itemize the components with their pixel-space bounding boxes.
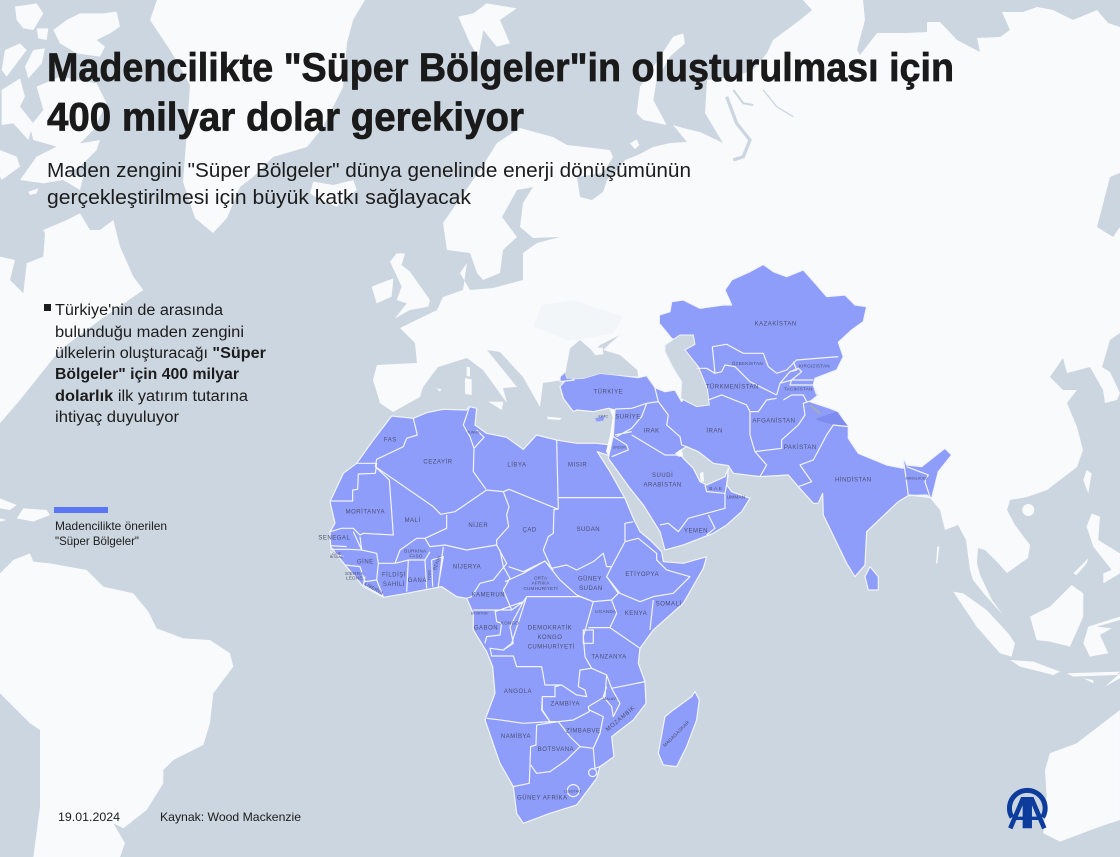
- callout text with bullet: ülkelerin oluşturacağı "Süper: [55, 345, 266, 362]
- legend: [54, 507, 167, 548]
- Africa labels: MALAVİ: [603, 696, 617, 701]
- title: 400 milyar dolar gerekiyor: [47, 96, 524, 140]
- Africa labels: MOZAMBİK: [605, 705, 637, 733]
- Africa labels: TUNUS: [467, 430, 480, 434]
- Asia labels: YEMEN: [684, 528, 708, 534]
- Africa labels: LEONE: [346, 575, 363, 580]
- callout text with bullet: bulunduğu maden zengini: [55, 324, 244, 341]
- Asia labels: PAKİSTAN: [784, 444, 817, 451]
- callout text with bullet: Türkiye'nin de arasında: [55, 302, 223, 319]
- Africa labels: ZAMBİYA: [551, 701, 580, 708]
- Asia labels: ÜRDÜN: [613, 445, 626, 449]
- Africa labels: MALİ: [405, 517, 421, 524]
- Israel land strip: [606, 409, 618, 462]
- callout text with bullet: dolarlık ilk yatırım tutarına: [55, 388, 248, 405]
- Asia labels: UMMAN: [727, 494, 745, 499]
- Africa labels: SUDAN: [579, 586, 603, 592]
- Africa labels: ÇAD: [523, 527, 537, 533]
- Asia labels: TÜRKİYE: [593, 389, 623, 396]
- Africa labels: DEMOKRATİK: [528, 624, 572, 631]
- Africa labels: SENEGAL: [318, 535, 350, 541]
- Africa labels: TOGO: [427, 570, 431, 580]
- Madagascar: [658, 692, 699, 767]
- Africa labels: GÜNEY: [578, 575, 602, 582]
- Africa labels: ANGOLA: [504, 689, 532, 695]
- Africa labels: FASO: [409, 553, 423, 558]
- Asia labels: ARABİSTAN: [644, 482, 682, 489]
- Asia labels: ÖZBEKİSTAN: [732, 360, 763, 366]
- Africa labels: UGANDA: [595, 609, 617, 614]
- Africa labels: GİNE: [332, 551, 342, 556]
- subtitle: gerçekleştirilmesi için büyük katkı sağlayacak: [47, 187, 472, 209]
- Turkish Thrace: [560, 372, 574, 382]
- Asia labels: SUUDİ: [652, 472, 673, 479]
- Africa labels: KONGO: [501, 620, 519, 625]
- callout text with bullet: Bölgeler" için 400 milyar: [55, 366, 239, 383]
- subtitle: [47, 160, 691, 209]
- Africa labels: ORTA: [534, 575, 548, 580]
- Caribbean and South America: [0, 498, 233, 857]
- Africa labels: KONGO: [537, 635, 562, 641]
- Africa labels: TANZANYA: [591, 655, 627, 661]
- Asia labels: TÜRKMENİSTAN: [706, 383, 759, 390]
- Africa labels: CEZAYİR: [423, 458, 453, 465]
- Africa labels: GABON: [474, 625, 498, 631]
- Africa labels: NAMİBYA: [501, 733, 531, 740]
- Greenland: [150, 0, 365, 233]
- Africa labels: SAHİLİ: [383, 581, 405, 588]
- Africa labels: ETİYOPYA: [625, 571, 659, 578]
- Novaya Zemlya and Siberian river gulfs: [630, 33, 793, 160]
- Africa labels: KAMERUN: [471, 593, 505, 599]
- title: Madencilikte "Süper Bölgeler"in oluşturulması için: [47, 46, 954, 90]
- Asia labels: [593, 321, 928, 534]
- Cyprus: [595, 416, 605, 422]
- Asia labels: KKTC: [598, 415, 609, 419]
- Kashmir: [817, 412, 848, 427]
- Middle East, Central and South Asia region: [560, 264, 952, 590]
- Asia labels: KIRGIZİSTAN: [799, 362, 830, 368]
- callout text with bullet: [44, 302, 266, 426]
- Africa labels: BİSSAU: [330, 554, 344, 559]
- Caspian Sea: [665, 335, 709, 407]
- Africa labels: GÜNEY AFRİKA: [517, 795, 568, 802]
- Sri Lanka: [865, 567, 878, 590]
- Asia fill: [560, 264, 952, 577]
- Asia labels: BANGLADEŞ: [906, 476, 928, 480]
- Africa labels: SUDAN: [576, 527, 600, 533]
- Africa labels: MORİTANYA: [346, 508, 385, 515]
- Africa labels: EKVATOR: [471, 611, 488, 615]
- Asia labels: AFGANİSTAN: [752, 418, 796, 425]
- date: 19.01.2024: [58, 810, 120, 824]
- Kuwait gap and Qatar: [675, 449, 683, 457]
- Asia labels: SURİYE: [615, 413, 641, 420]
- Asia labels: HİNDİSTAN: [835, 477, 872, 484]
- Africa labels: BURKİNA: [404, 547, 427, 553]
- callout text with bullet: ihtiyaç duyuluyor: [55, 409, 179, 426]
- Africa labels: NİJERYA: [453, 563, 481, 570]
- Africa labels: CUMHURİYETİ: [523, 585, 558, 591]
- title: [47, 46, 954, 140]
- Asia labels: İRAN: [706, 427, 723, 434]
- Africa region: [318, 407, 707, 823]
- Africa labels: GANA: [408, 578, 427, 584]
- Africa labels: FAS: [384, 438, 397, 444]
- Asia labels: B.A.E: [709, 486, 722, 491]
- Africa country borders: [330, 407, 690, 787]
- Africa labels: BENİN: [431, 554, 442, 571]
- icon: AA logo: [1009, 790, 1045, 828]
- Africa labels: NİJER: [468, 522, 488, 529]
- Africa labels: CUMHURİYETİ: [528, 643, 575, 650]
- legend: Madencilikte önerilen: [55, 519, 167, 533]
- subtitle: Maden zengini "Süper Bölgeler" dünya genelinde enerji dönüşümünün: [47, 160, 691, 182]
- Asia labels: IRAK: [644, 428, 660, 434]
- Africa labels: KENYA: [625, 611, 647, 617]
- Africa labels: GİNE: [357, 559, 374, 566]
- Africa labels: AFRİKA: [532, 580, 550, 586]
- Africa labels: ZİMBABVE: [566, 728, 601, 735]
- Africa labels: LİBERYA: [364, 580, 385, 596]
- Asia country borders: [612, 344, 930, 535]
- Africa labels: SİERRA: [345, 570, 364, 576]
- legend: "Süper Bölgeler": [55, 534, 139, 548]
- Africa labels: [318, 430, 691, 802]
- Africa labels: MADAGASKAR: [662, 720, 691, 748]
- Africa labels: MISIR: [568, 463, 587, 469]
- Africa labels: LİBYA: [507, 462, 527, 469]
- Asia labels: TACİKİSTAN: [784, 386, 813, 392]
- Britain, Ireland and Mediterranean islands: [372, 253, 623, 420]
- Southeast Asia and Australia: [936, 470, 1120, 842]
- source: Kaynak: Wood Mackenzie: [160, 810, 301, 824]
- Black Sea: [565, 335, 638, 379]
- Persian Gulf and Gulf of Oman water: [673, 442, 763, 502]
- Africa labels: BOTSVANA: [538, 747, 574, 753]
- Africa labels: LESOTHO: [564, 789, 582, 793]
- Iceland, Svalbard: [310, 3, 517, 207]
- Africa labels: FİLDİŞİ: [382, 572, 406, 579]
- Asia labels: KAZAKİSTAN: [755, 321, 797, 328]
- Africa labels: SOMALİ: [656, 600, 682, 607]
